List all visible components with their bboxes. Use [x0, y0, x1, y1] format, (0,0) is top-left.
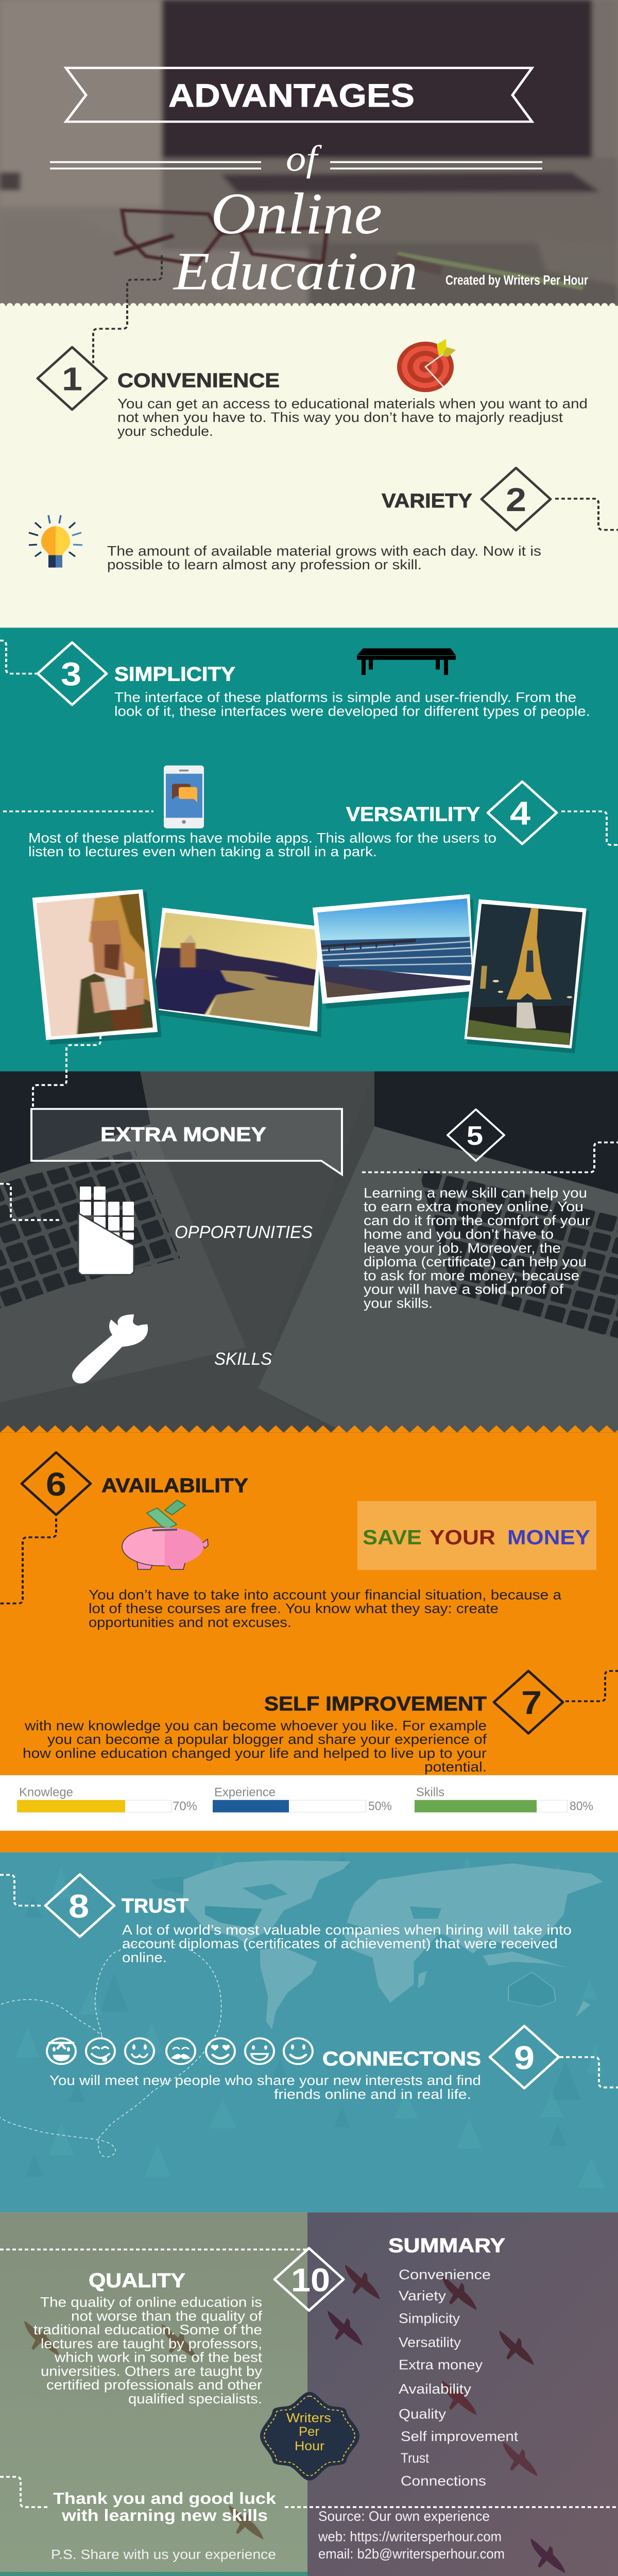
title: Online Education [173, 181, 418, 301]
body text: extra money: your skills. [364, 1296, 433, 1311]
closing message [51, 2490, 277, 2562]
emoji: tongue out [86, 2038, 115, 2064]
body text: extra money: can do it from the comfort of your [364, 1213, 590, 1228]
closing message: Thank you and good luck [53, 2490, 277, 2508]
panel: cream section [0, 306, 618, 628]
bar: skills 80%: 80% [570, 1800, 593, 1813]
body text [89, 1587, 561, 1630]
body text: extra money: to earn extra money online. You [364, 1199, 583, 1215]
badge: Writers Per Hour: Writers [286, 2411, 331, 2425]
heading: CONNECTONS [322, 2047, 481, 2070]
section 6: availability [22, 1452, 596, 1630]
body text: extra money: diploma (certificate) can help you [364, 1255, 587, 1270]
body text: You will meet new people who share your new interests and find [49, 2073, 481, 2089]
callout: extra money [31, 1109, 342, 1175]
diamond number 6: 6 [46, 1466, 66, 1503]
body text: how online education changed your life and helped to live up to your [23, 1745, 487, 1761]
body text: You can get an access to educational materials when you want to and [117, 396, 588, 412]
birds flock [24, 2265, 565, 2573]
body text [117, 396, 588, 439]
bar: experience 50%: Experience [214, 1786, 276, 1799]
panel: progress bars [0, 1775, 618, 1831]
heading: SIMPLICITY [114, 663, 235, 685]
panel: summary right [307, 2212, 618, 2576]
badge: Writers Per Hour: Per [299, 2425, 319, 2439]
heading: AVAILABILITY [101, 1474, 248, 1497]
body text: your schedule. [117, 423, 213, 439]
body text: extra money: Learning a new skill can help you [364, 1185, 587, 1201]
emoji: heart eyes [206, 2038, 235, 2064]
body text: extra money: leave your job. Moreover, the [364, 1241, 561, 1256]
diamond number 1 [38, 347, 107, 410]
icon: bench [357, 648, 456, 675]
body text: you can become a popular blogger and share your experience of [47, 1732, 487, 1748]
section 7: self improvement [23, 1671, 563, 1775]
summary list [399, 2267, 518, 2489]
photo collage [32, 889, 589, 1054]
emoji: open smile [245, 2038, 274, 2064]
heading: QUALITY [89, 2269, 185, 2292]
emoji: simple smile [284, 2038, 313, 2064]
icon: phone [164, 766, 204, 828]
body text: account diplomas (certificates of achievement) that were received [122, 1936, 558, 1952]
bar: skills 80% [415, 1786, 593, 1813]
heading: TRUST [122, 1894, 188, 1917]
body text [114, 690, 590, 719]
body text: qualified specialists. [128, 2391, 262, 2406]
dotted connectors: white upper [0, 640, 618, 1220]
body text: lectures are taught by professors, [41, 2336, 262, 2352]
label: skills: SKILLS [214, 1349, 272, 1368]
dotted connectors: dark [93, 256, 618, 530]
diamond number 7: 7 [521, 1685, 542, 1721]
icon: wrench [72, 1314, 148, 1383]
body text: extra money: home and you don’t have to [364, 1227, 554, 1242]
diamond number 9: 9 [514, 2040, 535, 2076]
diamond number 1: 1 [62, 361, 82, 398]
panel: teal section [0, 628, 618, 1071]
heading: summary: SUMMARY [388, 2234, 505, 2257]
icon: light bulb [29, 515, 82, 568]
title: Online Education: Online [211, 181, 382, 246]
photo: pier and beach [313, 894, 479, 1009]
summary list: Versatility [399, 2335, 461, 2350]
closing message: with learning new skills [61, 2507, 268, 2525]
body text [122, 1922, 572, 1965]
bar: skills 80%: Skills [416, 1786, 444, 1799]
icon: piggy bank [122, 1500, 208, 1569]
body text: which work in some of the best [54, 2350, 262, 2365]
bar: experience 50%: 50% [368, 1800, 392, 1813]
body text: not worse than the quality of [71, 2309, 262, 2324]
section 3: simplicity [38, 642, 590, 719]
body text [49, 2073, 481, 2103]
body text: certified professionals and other [46, 2378, 262, 2393]
body text: A lot of world’s most valuable companies when hiring will take into [122, 1922, 572, 1938]
diamond number 3: 3 [61, 656, 81, 693]
section 9: connections [49, 2026, 559, 2103]
section 1: convenience [38, 339, 588, 439]
source and contact: Source: Our own experience [318, 2509, 490, 2524]
callout: extra money: EXTRA MONEY [100, 1123, 266, 1145]
body text [23, 1718, 487, 1775]
icon: target [397, 339, 456, 392]
source and contact: email: b2b@writersperhour.com [318, 2547, 505, 2562]
body text: The quality of online education is [40, 2295, 262, 2310]
emoji: grin with headband [47, 2038, 76, 2064]
panel: quality left [0, 2212, 307, 2576]
body text: look of it, these interfaces were developed for different types of people. [114, 704, 590, 719]
body text: online. [122, 1950, 167, 1965]
icon: chocolate bar [78, 1187, 134, 1275]
save your money box: MONEY [507, 1526, 590, 1549]
body text: You don’t have to take into account your financial situation, because a [89, 1587, 561, 1603]
source and contact: web: https://writersperhour.com [318, 2529, 502, 2545]
diamond number 5: 5 [467, 1121, 483, 1150]
summary list: Quality [399, 2406, 447, 2422]
diamond number 5 [448, 1109, 504, 1161]
summary list: Trust [401, 2450, 429, 2466]
diamond number 2 [482, 468, 551, 530]
summary list: Variety [399, 2289, 447, 2304]
panel: orange section [0, 1425, 618, 1852]
body text: The interface of these platforms is simple and user-friendly. From the [114, 690, 576, 705]
bar: experience 50% [213, 1786, 392, 1813]
heading: CONVENIENCE [117, 369, 280, 392]
dashed heart decoration [0, 1943, 221, 2157]
badge: Writers Per Hour [260, 2392, 359, 2481]
section 2: variety [29, 468, 551, 573]
body text [107, 544, 541, 573]
panel: dark laptop section [0, 1071, 618, 1434]
summary list: Availability [399, 2382, 472, 2397]
diamond number 7 [494, 1671, 563, 1734]
body text: universities. Others are taught by [41, 2364, 263, 2379]
section 4: versatility [28, 766, 557, 860]
body text: not when you have to. This way you don’t have to majorly readjust [117, 410, 563, 426]
save your money box: YOUR [430, 1526, 495, 1549]
world map [150, 1860, 603, 2029]
body text: traditional education. Some of the [33, 2323, 262, 2338]
section 8: trust [45, 1874, 572, 1965]
photo: woman with mug [32, 889, 162, 1045]
dotted connectors: orange section [0, 1518, 618, 1701]
body text: extra money [364, 1185, 590, 1311]
section 10: quality [33, 2269, 263, 2406]
title banner: ADVANTAGES [168, 77, 415, 114]
postscript: P.S. Share with us your experience [51, 2547, 276, 2562]
summary list: Extra money [399, 2357, 483, 2373]
body text: Most of these platforms have mobile apps. This allows for the users to [28, 831, 496, 846]
heading: VERSATILITY [346, 803, 480, 825]
badge: Writers Per Hour: Hour [295, 2438, 324, 2453]
source and contact [318, 2509, 505, 2562]
bar: knowledge 70% [17, 1786, 197, 1813]
heading: SELF IMPROVEMENT [264, 1692, 487, 1715]
body text: extra money: to ask for more money, because [364, 1268, 579, 1283]
subtitle "of" with double rules [50, 139, 542, 179]
body text: friends online and in real life. [274, 2087, 471, 2103]
summary list: Connections [401, 2473, 486, 2489]
title: Online Education: Education [173, 241, 418, 301]
diamond number 2: 2 [506, 482, 526, 518]
bar: knowledge 70%: 70% [173, 1800, 197, 1813]
panel: hero photo background [0, 0, 618, 308]
summary list: Simplicity [399, 2311, 460, 2326]
subtitle "of" with double rules: of [286, 139, 322, 179]
save your money box: SAVE [363, 1526, 422, 1549]
body text: extra money: your will have a solid proof of [364, 1282, 563, 1297]
diamond number 6 [22, 1452, 91, 1515]
photo: lighthouse coast [150, 908, 323, 1037]
body text: lot of these courses are free. You know what they say: create [89, 1601, 499, 1617]
diamond number 4 [488, 782, 557, 844]
icon: glasses [114, 210, 327, 264]
save your money box [357, 1501, 596, 1570]
body text: The amount of available material grows with each day. Now it is [107, 544, 541, 559]
body text: listen to lectures even when taking a stroll in a park. [28, 844, 377, 860]
body text [33, 2295, 263, 2406]
diamond number 3 [38, 642, 107, 705]
diamond number 4: 4 [510, 795, 530, 832]
summary list: Self improvement [401, 2429, 518, 2445]
photo: Eiffel Tower at night [465, 899, 589, 1054]
bar: knowledge 70%: Knowlege [19, 1786, 73, 1799]
body text [28, 831, 496, 860]
body text: opportunities and not excuses. [89, 1615, 291, 1630]
body text: with new knowledge you can become whoever you like. For example [24, 1718, 487, 1734]
body text: possible to learn almost any profession or skill. [107, 557, 422, 573]
heading: VARIETY [382, 489, 472, 512]
title banner [66, 68, 532, 122]
body text: potential. [424, 1759, 487, 1775]
diamond number 8 [45, 1874, 114, 1937]
diamond number 9 [490, 2026, 559, 2088]
diamond number 8: 8 [68, 1888, 89, 1925]
panel: world map section [0, 1852, 618, 2212]
diamond number 10: 10 [291, 2262, 330, 2299]
diamond number 10 [274, 2248, 344, 2311]
emoji row [47, 2038, 313, 2064]
dotted connectors: white lower [0, 1875, 618, 2507]
emoji: moustache [166, 2038, 195, 2064]
label: opportunities: OPPORTUNITIES [175, 1222, 313, 1242]
emoji: wavy smile [125, 2038, 154, 2064]
summary list: Convenience [399, 2267, 491, 2283]
